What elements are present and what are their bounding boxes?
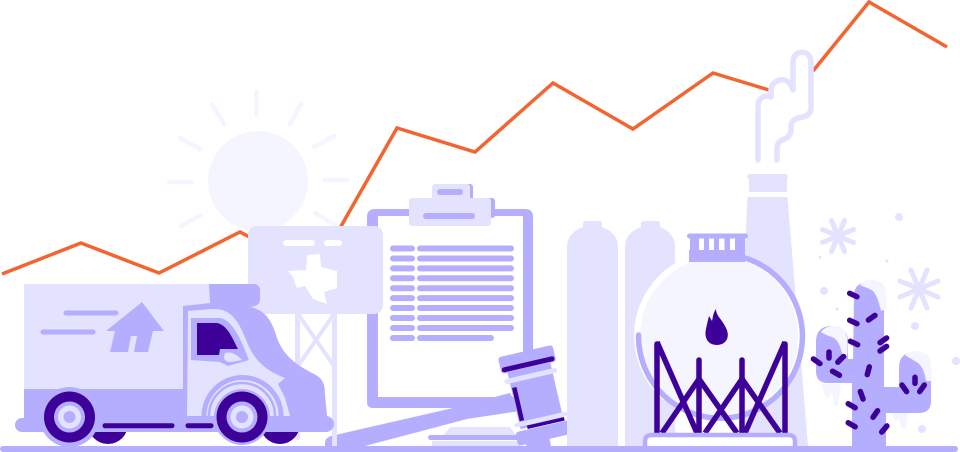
ground line — [0, 446, 958, 452]
icon: Texas silhouette — [288, 254, 337, 304]
icon: house on truck — [106, 302, 164, 352]
icon: smoke — [758, 52, 811, 160]
icon: billboard with Texas map — [248, 226, 383, 446]
clip — [409, 184, 495, 226]
handle — [325, 393, 520, 446]
front wheel — [214, 389, 270, 445]
wheel arch — [204, 378, 281, 416]
underbody bars — [105, 423, 211, 428]
icon: frozen cactus — [813, 280, 932, 446]
far wheels — [88, 404, 300, 444]
document text lines — [390, 246, 514, 341]
cab body — [183, 284, 334, 432]
spines — [813, 293, 924, 432]
icon: gas storage sphere — [625, 234, 808, 446]
icicles — [822, 384, 908, 429]
cab panel — [187, 309, 290, 416]
support legs — [657, 342, 785, 433]
line chart: rising price trend — [2, 2, 947, 274]
icon: snowflakes and dots — [818, 213, 960, 433]
icon: moving truck — [15, 284, 334, 447]
icon: flame — [705, 309, 728, 345]
cactus body — [816, 282, 931, 446]
icon: sun — [169, 92, 347, 231]
sounding block — [428, 427, 520, 446]
cab window — [197, 323, 238, 355]
icon: gavel — [325, 344, 581, 452]
side mirror — [224, 353, 242, 362]
speed lines — [43, 313, 116, 332]
icon: clipboard with document — [367, 184, 533, 408]
icon: factory chimney — [730, 174, 808, 446]
snow caps — [821, 280, 932, 381]
icon: gas cylinders — [567, 221, 675, 446]
rear wheel — [42, 389, 98, 445]
tank top fitting — [687, 234, 748, 262]
cargo box — [24, 284, 210, 390]
head — [498, 344, 581, 452]
tank base — [645, 435, 795, 446]
